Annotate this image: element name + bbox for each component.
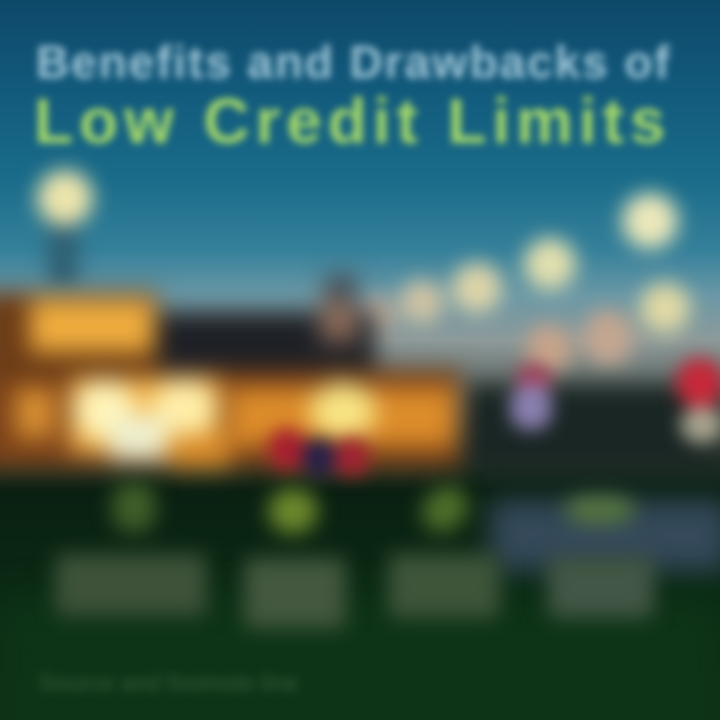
lanterns in the sky: [22, 154, 702, 381]
icon 1: [112, 482, 156, 532]
bright window left: [74, 380, 136, 440]
balloon red right: [334, 438, 370, 476]
icon 2: [268, 488, 318, 534]
door glow: [110, 416, 166, 460]
balloon navy: [302, 438, 336, 478]
lantern pole: [48, 225, 78, 285]
title line 1: Benefits and Drawbacks of: [36, 36, 671, 88]
lantern 6: [640, 283, 690, 333]
sign glow: [30, 300, 154, 352]
chimney cap: [326, 274, 356, 300]
title: [32, 36, 674, 157]
lantern 4: [452, 263, 502, 313]
window glow 3: [230, 388, 455, 446]
lantern 9: [526, 325, 572, 375]
text block 1: [55, 554, 207, 616]
pond: [490, 500, 720, 572]
balloon red far right: [676, 358, 720, 408]
balloon pale far right: [680, 406, 720, 444]
building wall: [0, 370, 460, 468]
balloon purple: [510, 384, 552, 430]
lantern 5: [400, 280, 444, 324]
lantern 7: [360, 295, 396, 337]
chimney: [320, 292, 358, 342]
sign board: [0, 292, 158, 380]
balloon red left: [268, 428, 306, 470]
lantern 8: [583, 310, 633, 366]
bright window centre: [310, 382, 376, 440]
lantern 1: [37, 170, 93, 226]
right side treeline: [465, 385, 720, 470]
text block 3: [388, 554, 500, 618]
lantern 3: [524, 238, 576, 290]
balloons: [258, 347, 720, 488]
lawn foreground: [0, 600, 720, 720]
roof: [150, 312, 375, 372]
bright window right: [152, 378, 216, 438]
column icons and text: [46, 476, 664, 638]
footer text: Source and footnote line: [38, 670, 298, 697]
text block 4: [548, 556, 654, 618]
window glow 2: [70, 378, 220, 453]
icon 4: [566, 496, 634, 524]
text block 2: [244, 558, 346, 628]
lower floor glow: [170, 435, 230, 469]
icon 3: [412, 476, 478, 542]
balloon red top: [516, 364, 552, 394]
lantern 2: [622, 193, 678, 249]
window glow 1: [15, 388, 55, 438]
building: [0, 261, 476, 488]
title line 2: Low Credit Limits: [34, 85, 671, 157]
